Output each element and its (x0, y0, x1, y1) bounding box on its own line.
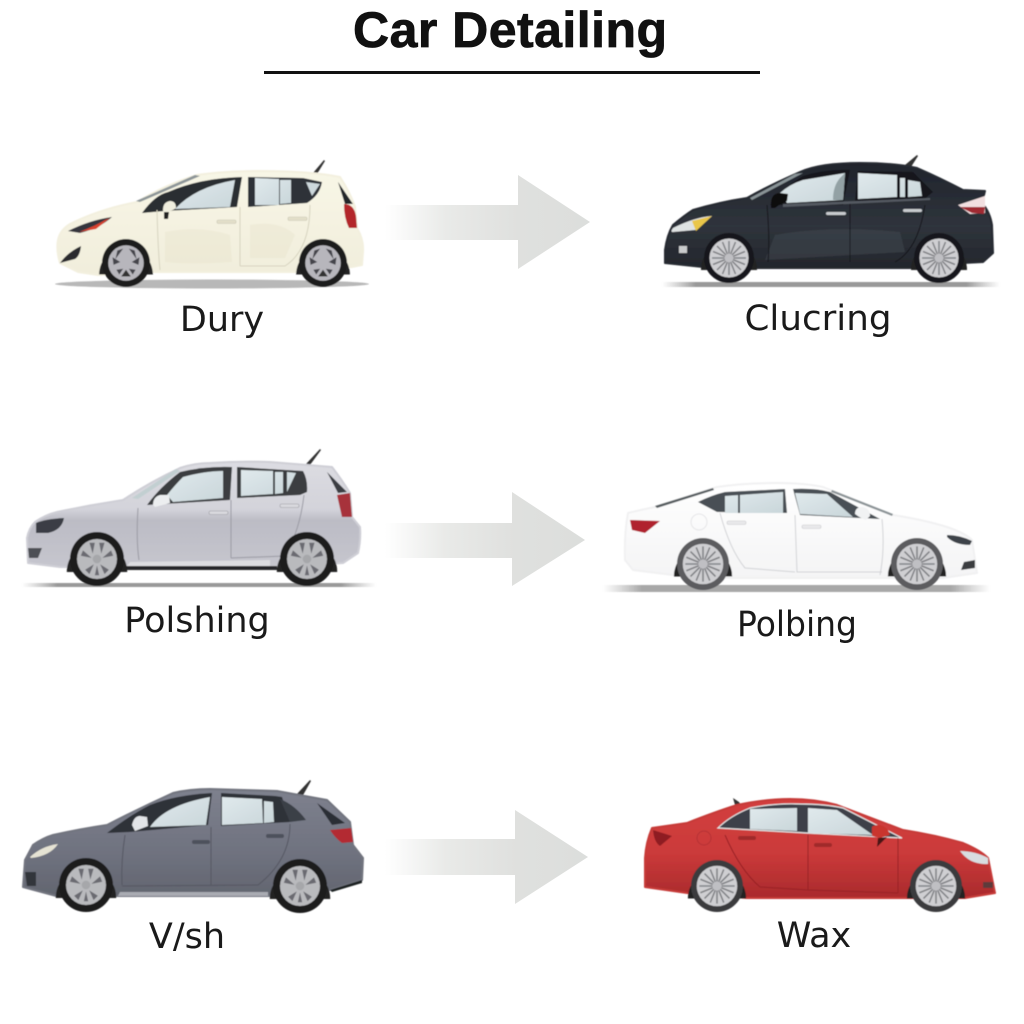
label: Dury: Dury (180, 300, 264, 340)
arrow 3 (385, 810, 588, 904)
car: silver hatchback (22, 449, 376, 587)
title underline (264, 71, 760, 74)
label: Clucring: Clucring (744, 299, 892, 339)
car: waxed red sedan (645, 798, 995, 912)
label: Wax: Wax (777, 916, 851, 956)
arrow 1 (385, 175, 590, 269)
label: Polshing: Polshing (124, 601, 270, 641)
car: white sedan (603, 483, 990, 592)
car: grey hatchback (23, 780, 363, 913)
title: Car Detailing (353, 2, 667, 58)
label: Vlsh: V/sh (149, 917, 225, 957)
arrow 2 (385, 492, 585, 586)
car: clean black sedan (662, 155, 1000, 287)
car: dirty cream hatchback (55, 160, 369, 288)
label: Polbing: Polbing (737, 605, 857, 645)
